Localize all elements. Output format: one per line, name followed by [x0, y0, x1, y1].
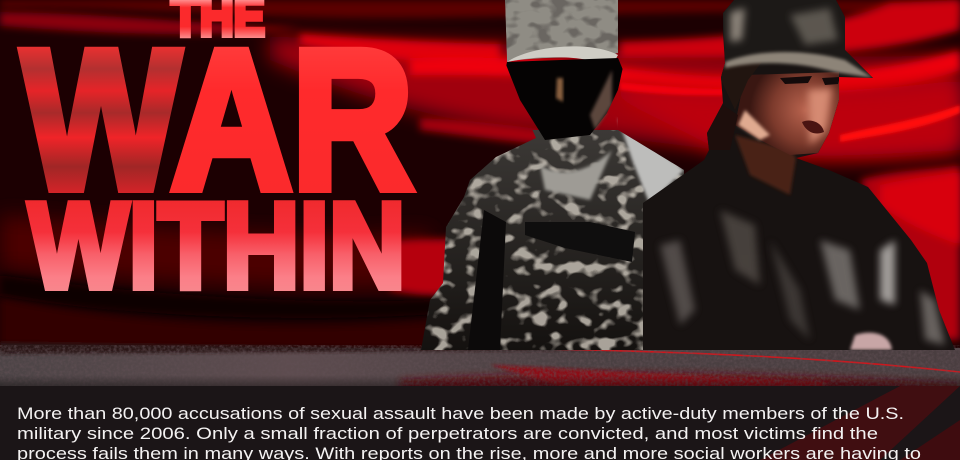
hair and ear [721, 63, 759, 109]
background: red flag waves [0, 0, 960, 350]
figure: female soldier [640, 0, 960, 350]
paragraph line 2: military since 2006. Only a small fraction of perpetrators are convicted, and most victims find the [17, 425, 878, 443]
neck [735, 135, 796, 195]
face [505, 58, 623, 140]
title word: WITHIN: WITHIN [28, 178, 406, 314]
face [735, 72, 839, 155]
dark straps [468, 210, 506, 350]
title: THE WAR WITHIN [22, 0, 413, 314]
paragraph line 1: More than 80,000 accusations of sexual assault have been made by active-duty members of the U.S. [17, 405, 904, 423]
jacket highlights [660, 240, 695, 325]
title words: WAR: WAR [22, 9, 413, 230]
cap [505, 0, 618, 62]
text panel [0, 386, 960, 460]
collar and shirt [540, 150, 612, 200]
grey distressed band [0, 342, 960, 392]
cap [724, 16, 873, 78]
intro paragraph [17, 405, 921, 460]
figure: male soldier [420, 0, 690, 350]
